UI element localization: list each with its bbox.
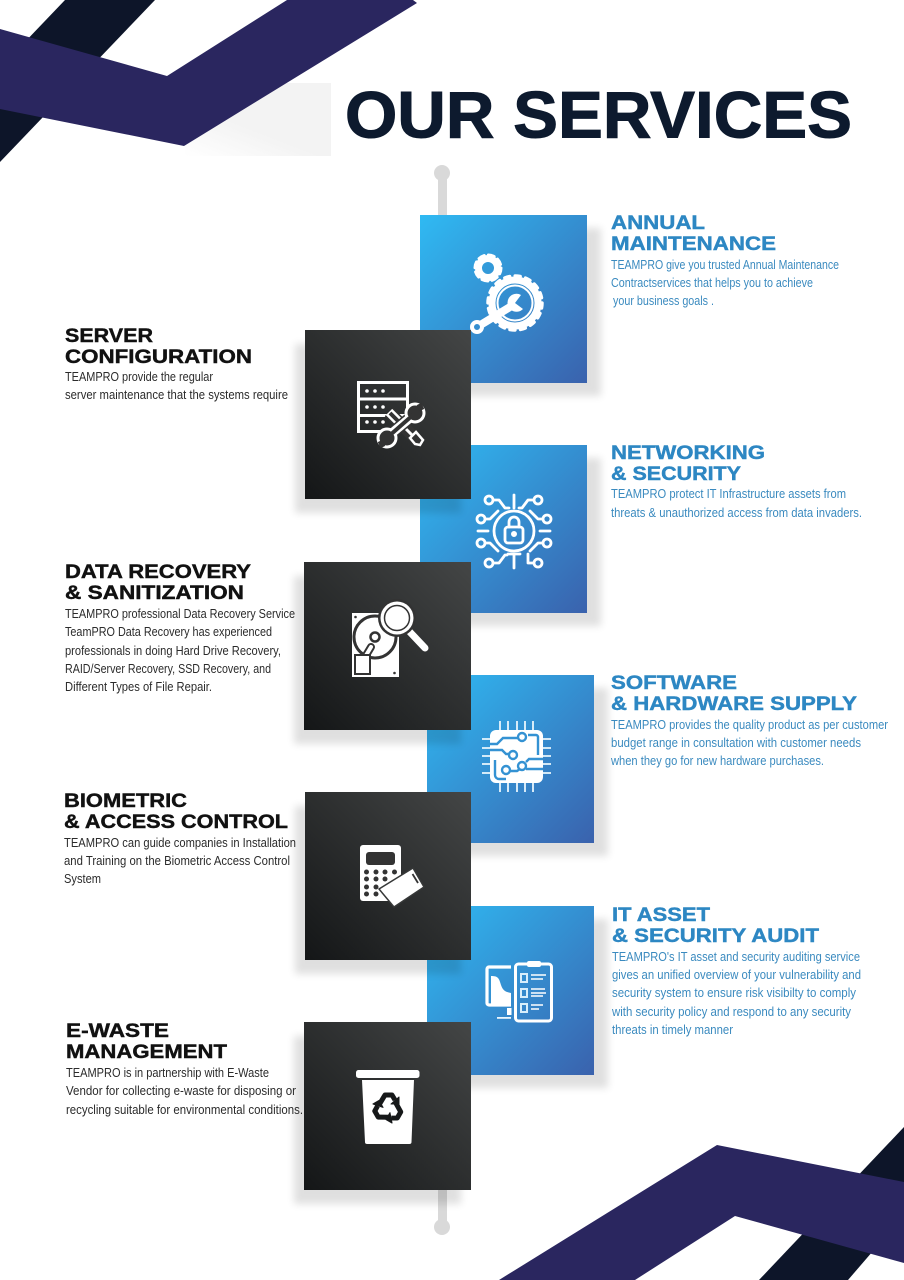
description <box>66 1065 303 1117</box>
heading: ANNUAL <box>611 212 705 234</box>
description: budget range in consultation with customer needs <box>611 735 861 750</box>
description <box>611 257 839 308</box>
description: TEAMPRO can guide companies in Installation <box>64 835 296 850</box>
description: server maintenance that the systems require <box>65 387 288 402</box>
description: Different Types of File Repair. <box>65 679 212 694</box>
heading <box>66 1020 227 1063</box>
description <box>64 835 296 886</box>
timeline bottom connector <box>434 1187 450 1235</box>
icon: monitor and clipboard <box>487 961 552 1021</box>
description: RAID/Server Recovery, SSD Recovery, and <box>65 661 271 676</box>
description <box>611 949 861 1037</box>
heading: MAINTENANCE <box>611 233 776 255</box>
timeline top connector <box>434 165 450 218</box>
panel: biometric and access control <box>64 790 471 974</box>
description: threats & unauthorized access from data invaders. <box>611 505 862 520</box>
heading: BIOMETRIC <box>64 790 187 812</box>
background panel behind title <box>185 83 331 156</box>
heading <box>65 561 251 604</box>
heading: & SANITIZATION <box>65 582 244 604</box>
description: TEAMPRO is in partnership with E-Waste <box>66 1065 269 1080</box>
icon: microchip <box>482 721 551 792</box>
panel: software and hardware supply <box>427 672 889 856</box>
heading: DATA RECOVERY <box>65 561 251 583</box>
panel: networking and security <box>420 442 862 626</box>
heading: IT ASSET <box>612 904 710 926</box>
description: Vendor for collecting e-waste for disposing or <box>66 1083 297 1098</box>
description: gives an unified overview of your vulnerability and <box>612 967 861 982</box>
bottom-right purple ribbon <box>499 1145 904 1280</box>
description: System <box>64 871 101 886</box>
description: TEAMPRO's IT asset and security auditing service <box>612 949 860 964</box>
icon: recycling bin <box>356 1070 420 1144</box>
heading: CONFIGURATION <box>65 346 252 368</box>
heading <box>611 442 765 485</box>
description: recycling suitable for environmental conditions. <box>66 1102 303 1117</box>
panel: annual maintenance <box>420 212 839 396</box>
description: Contractservices that helps you to achieve <box>611 275 813 290</box>
heading: & ACCESS CONTROL <box>64 811 288 833</box>
panel: IT asset and security audit <box>427 904 861 1088</box>
description: TEAMPRO professional Data Recovery Service <box>65 606 295 621</box>
heading <box>65 325 252 368</box>
description: with security policy and respond to any security <box>611 1004 851 1019</box>
panel: e-waste management <box>66 1020 471 1204</box>
description: TEAMPRO protect IT Infrastructure assets from <box>611 486 846 501</box>
heading <box>64 790 288 833</box>
title: OUR SERVICES <box>345 78 852 152</box>
description: TEAMPRO provide the regular <box>65 369 214 384</box>
heading: & SECURITY <box>611 463 741 485</box>
description <box>65 606 295 694</box>
heading: SOFTWARE <box>611 672 737 694</box>
description: professionals in doing Hard Drive Recovery, <box>65 643 281 658</box>
top-left purple ribbon <box>0 0 417 146</box>
top-left dark stripe <box>0 0 155 162</box>
description <box>65 369 288 402</box>
panel: data recovery and sanitization <box>65 561 471 744</box>
description <box>610 717 889 768</box>
bottom-right dark stripe <box>759 1127 904 1280</box>
description: threats in timely manner <box>612 1022 734 1037</box>
description: your business goals . <box>613 293 714 308</box>
description: TeamPRO Data Recovery has experienced <box>65 624 272 639</box>
icon: server with tools <box>358 382 424 447</box>
heading: & HARDWARE SUPPLY <box>611 693 857 715</box>
icon: keypad and access card <box>360 845 424 907</box>
heading: SERVER <box>65 325 153 347</box>
description: TEAMPRO give you trusted Annual Maintenance <box>611 257 839 272</box>
description: when they go for new hardware purchases. <box>610 753 824 768</box>
icon: gears and wrench <box>472 255 542 332</box>
icon: circuit lock <box>477 495 551 568</box>
heading: E-WASTE <box>66 1020 169 1042</box>
heading: NETWORKING <box>611 442 765 464</box>
description: and Training on the Biometric Access Control <box>64 853 290 868</box>
heading: & SECURITY AUDIT <box>612 925 819 947</box>
description: security system to ensure risk visibilty to comply <box>612 985 856 1000</box>
description <box>611 486 862 520</box>
heading <box>611 212 776 255</box>
heading <box>612 904 819 947</box>
heading <box>611 672 857 715</box>
icon: hard drive and magnifier <box>352 599 425 677</box>
heading: MANAGEMENT <box>66 1041 227 1063</box>
panel: server configuration <box>65 325 471 513</box>
